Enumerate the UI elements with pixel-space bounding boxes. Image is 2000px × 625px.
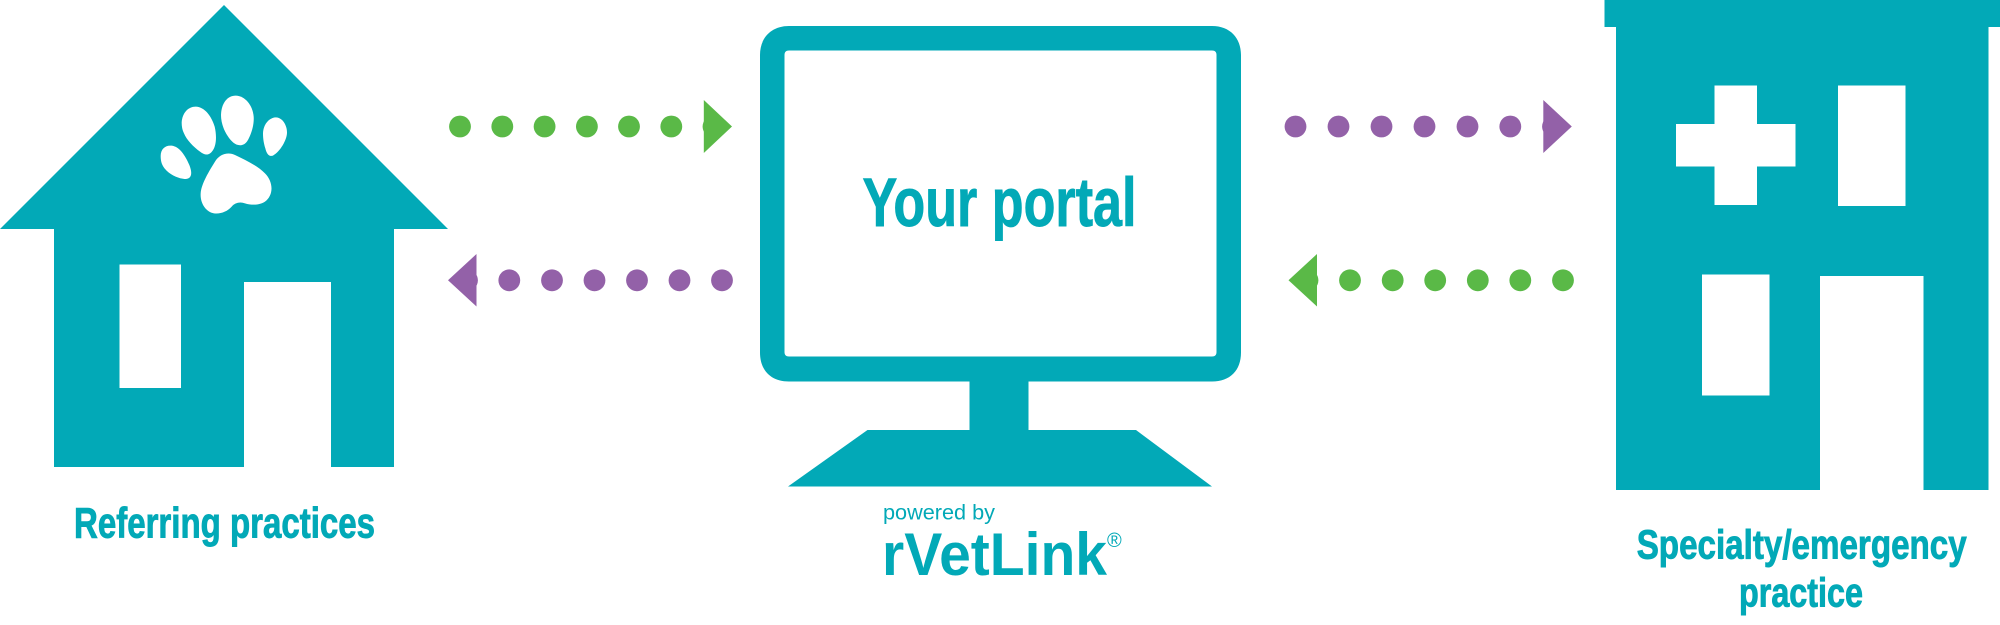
logo: powered by rVetLink: powered by bbox=[883, 502, 996, 524]
logo: powered by rVetLink: ® bbox=[1107, 530, 1122, 552]
icon: specialty/emergency hospital building bbox=[1604, 0, 2000, 490]
icon: computer monitor bbox=[760, 26, 1241, 486]
arrow: purple dotted arrow to referring practices bbox=[448, 254, 733, 306]
label: specialty/emergency practice bbox=[1637, 522, 1967, 616]
arrow: green dotted arrow to portal bbox=[1288, 254, 1574, 306]
arrow: green dotted arrow to portal bbox=[449, 100, 732, 153]
text: your portal: Your portal bbox=[862, 164, 1136, 241]
icon: paw print bbox=[161, 96, 287, 214]
label: specialty/emergency practice: practice bbox=[1739, 570, 1863, 616]
icon: referring practice house bbox=[0, 5, 448, 467]
arrow: purple dotted arrow to specialty practice bbox=[1285, 100, 1572, 153]
label: referring practices: Referring practices bbox=[74, 500, 375, 548]
logo: powered by rVetLink: rVetLink bbox=[882, 521, 1108, 588]
